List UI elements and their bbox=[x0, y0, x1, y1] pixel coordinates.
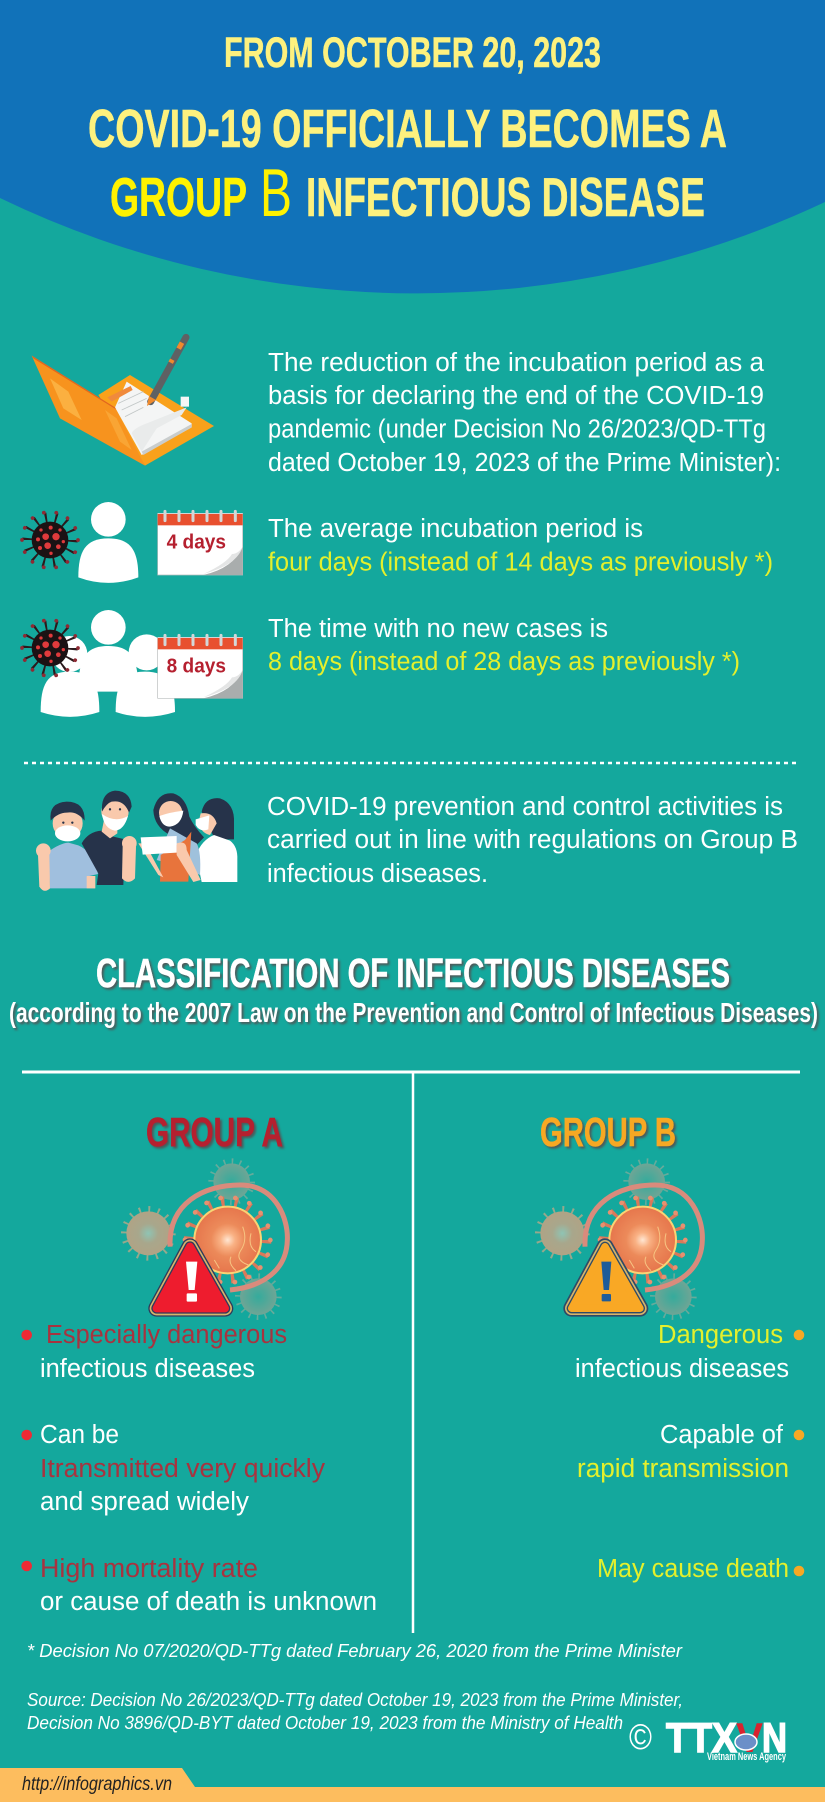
heading: group B: GROUP B bbox=[540, 1109, 676, 1155]
text: intro paragraph: dated October 19, 2023 of the Prime Minister): bbox=[268, 449, 781, 477]
logo: TTXVN: TTX bbox=[666, 1714, 737, 1761]
text: intro paragraph: basis for declaring the end of the COVID-19 bbox=[268, 382, 764, 410]
list: group A bullets: Itransmitted very quickly bbox=[40, 1455, 325, 1483]
title line 2: B bbox=[260, 155, 292, 231]
text: incubation period bbox=[268, 515, 773, 576]
list: group A bullets: and spread widely bbox=[40, 1488, 249, 1516]
title bbox=[88, 29, 727, 231]
list: group A bullets: High mortality rate bbox=[40, 1555, 258, 1583]
person 4 bbox=[196, 798, 237, 882]
icon: virus cluster with red warning bbox=[125, 1162, 287, 1317]
text: prevention activities bbox=[267, 793, 798, 888]
icon: calendar 4 days bbox=[158, 511, 243, 575]
list: group A bullets: Can be bbox=[40, 1421, 119, 1449]
icon: person bbox=[78, 502, 138, 583]
person 3 bbox=[138, 793, 204, 882]
date line: FROM OCTOBER 20, 2023 bbox=[224, 29, 601, 77]
list: group B bullets: rapid transmission bbox=[577, 1455, 789, 1483]
panel: group A bbox=[21, 1109, 377, 1616]
panel: group B bbox=[539, 1109, 804, 1583]
text: incubation period: The average incubation period is bbox=[268, 515, 643, 543]
icon: virus cluster with yellow warning bbox=[539, 1162, 702, 1317]
list: group A bullets bbox=[21, 1321, 377, 1616]
text: no new cases bbox=[268, 615, 740, 676]
list: group B bullets: Capable of bbox=[660, 1421, 784, 1449]
list: group A bullets: Especially dangerous bbox=[46, 1321, 287, 1349]
source: Source: Decision No 26/2023/QD-TTg dated October 19, 2023 from the Prime Minister, bbox=[27, 1689, 683, 1710]
logo: TTXVN: N bbox=[762, 1714, 787, 1761]
text: intro paragraph: The reduction of the incubation period as a bbox=[268, 349, 765, 377]
logo: TTXVN: V bbox=[736, 1714, 763, 1761]
text: incubation period: four days (instead of 14 days as previously *) bbox=[268, 548, 773, 576]
footer url: http://infographics.vn bbox=[22, 1774, 172, 1795]
icon: group of people bbox=[41, 610, 175, 717]
icon: virus 1 bbox=[22, 512, 78, 568]
header band bbox=[0, 0, 825, 293]
text: prevention activities: carried out in line with regulations on Group B bbox=[267, 826, 798, 854]
list: group A bullets: infectious diseases bbox=[40, 1355, 255, 1383]
icon: folder with pen bbox=[32, 337, 214, 466]
icon: virus 2 bbox=[22, 620, 78, 676]
icon: calendar 4 days: 4 days bbox=[167, 530, 226, 553]
footer band bbox=[0, 1768, 825, 1802]
list: group A bullets: or cause of death is unknown bbox=[40, 1588, 377, 1616]
text: no new cases: The time with no new cases is bbox=[268, 615, 608, 643]
list: group B bullets: infectious diseases bbox=[575, 1355, 789, 1383]
list: group B bullets: May cause death bbox=[597, 1555, 789, 1583]
list: group B bullets: Dangerous bbox=[658, 1321, 783, 1349]
text: prevention activities: infectious diseases. bbox=[267, 860, 488, 888]
person 1 bbox=[36, 802, 98, 891]
icon: calendar 8 days: 8 days bbox=[167, 654, 226, 677]
logo: TTXVN: Vietnam News Agency bbox=[707, 1751, 787, 1763]
title line 2: GROUP bbox=[110, 166, 247, 228]
person 2 bbox=[82, 791, 137, 885]
source bbox=[27, 1689, 683, 1733]
source: Decision No 3896/QD-BYT dated October 19, 2023 from the Ministry of Health bbox=[27, 1712, 623, 1733]
logo: TTXVN bbox=[629, 1714, 787, 1763]
footnote: * Decision No 07/2020/QD-TTg dated February 26, 2020 from the Prime Minister bbox=[27, 1640, 683, 1661]
title line 2 bbox=[110, 155, 705, 231]
list: group B bullets bbox=[575, 1321, 804, 1583]
text: intro paragraph: pandemic (under Decision No 26/2023/QD-TTg bbox=[268, 416, 766, 444]
logo: TTXVN: © bbox=[629, 1716, 652, 1757]
heading: group A: GROUP A bbox=[146, 1109, 283, 1155]
icon: people with masks bbox=[36, 791, 237, 891]
text: intro paragraph bbox=[268, 349, 781, 477]
text: no new cases: 8 days (instead of 28 days as previously *) bbox=[268, 648, 740, 676]
text: prevention activities: COVID-19 prevention and control activities is bbox=[267, 793, 783, 821]
icon: calendar 8 days bbox=[158, 635, 243, 698]
